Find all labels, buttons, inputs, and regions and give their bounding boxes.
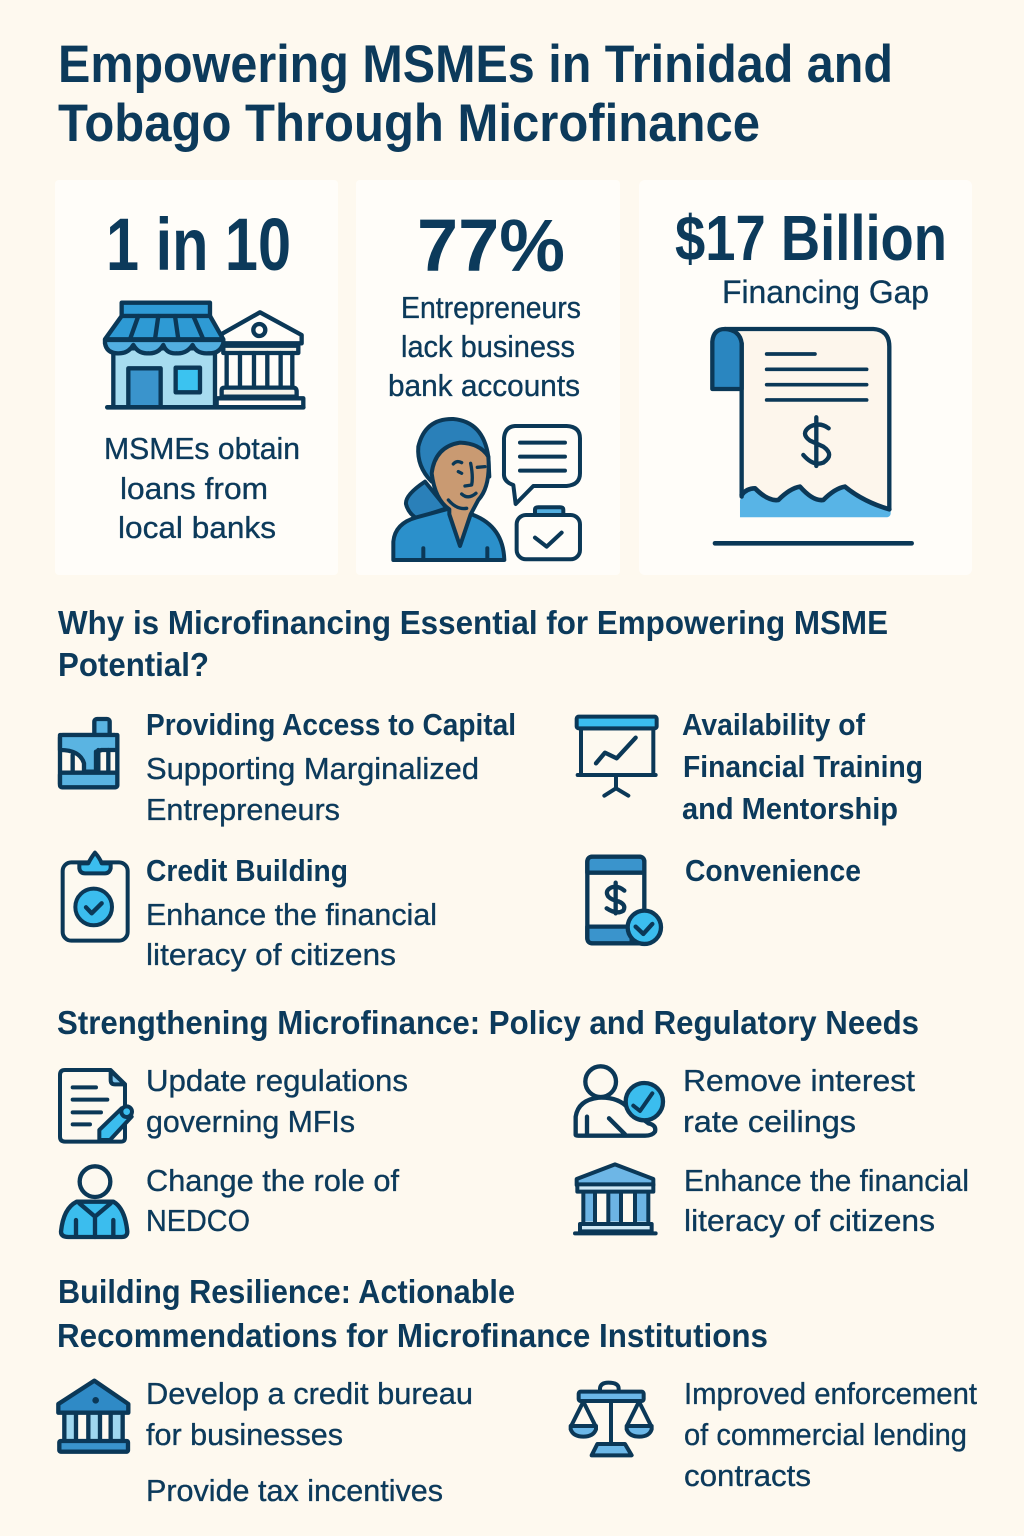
text: update regulations: governing MFIs	[146, 1104, 355, 1139]
text: convenience: Convenience	[685, 853, 861, 888]
section heading: why microfinancing: Potential?	[58, 646, 209, 683]
text: credit building: Enhance the financial	[146, 897, 437, 932]
stat number: 1 in 10: 1 in 10	[106, 203, 291, 286]
icon: columned institution	[575, 1164, 656, 1233]
description: Entrepreneurs lack business bank accounts	[388, 290, 581, 403]
panel: 1 in 10 statistic	[55, 180, 338, 575]
text: credit bureau and tax incentives: Provide tax incentives	[146, 1473, 443, 1508]
description: MSMEs obtain loans from local banks: MSMEs obtain	[104, 431, 300, 466]
text: credit bureau and tax incentives	[146, 1376, 473, 1508]
text: financial training and mentorship: Financial Training	[683, 749, 923, 784]
text: remove interest rate ceilings: Remove interest	[683, 1063, 915, 1098]
section heading: recommendations: Building Resilience: Actionable	[58, 1273, 515, 1310]
section heading: why microfinancing	[58, 604, 888, 683]
panel: 77% statistic	[356, 180, 620, 575]
text: financial training and mentorship: and Mentorship	[682, 791, 898, 826]
panel: $17 billion statistic	[639, 180, 972, 575]
icon: capital building	[60, 719, 117, 787]
title: Empowering MSMEs in Trinidad and	[58, 35, 893, 94]
section heading: policy and regulatory needs: Strengthening Microfinance: Policy and Regulatory Needs	[57, 1004, 919, 1041]
text: providing access to capital: Supporting Marginalized	[146, 751, 479, 786]
text: change the role of NEDCO: Change the role of	[146, 1163, 399, 1198]
text: credit building	[146, 853, 437, 972]
text: credit building: literacy of citizens	[146, 937, 396, 972]
text: enhance the financial literacy of citizens: Enhance the financial	[684, 1163, 969, 1198]
description: Entrepreneurs lack business bank accounts: lack business	[401, 329, 575, 364]
icon: document with pen	[60, 1070, 132, 1142]
icon: person in jacket	[61, 1166, 127, 1237]
text: financial training and mentorship: Availability of	[682, 707, 866, 742]
text: improved enforcement of commercial lending contracts: contracts	[684, 1458, 811, 1493]
text: improved enforcement of commercial lending contracts: Improved enforcement	[684, 1376, 977, 1411]
description: MSMEs obtain loans from local banks: loans from	[120, 471, 268, 506]
text: providing access to capital: Providing Access to Capital	[146, 707, 516, 742]
text: credit bureau and tax incentives: for businesses	[146, 1417, 343, 1452]
text: credit building: Credit Building	[146, 853, 348, 888]
text: change the role of NEDCO: NEDCO	[146, 1203, 250, 1238]
text: remove interest rate ceilings	[683, 1063, 915, 1139]
icon: presentation board	[577, 717, 657, 796]
text: update regulations	[146, 1063, 408, 1139]
icon: balance scales	[571, 1383, 652, 1455]
text: remove interest rate ceilings: rate ceilings	[683, 1104, 856, 1139]
icon: entrepreneur with speech bubble and briefcase	[393, 419, 580, 560]
text: enhance the financial literacy of citizens: literacy of citizens	[684, 1203, 935, 1238]
description: Entrepreneurs lack business bank accounts: Entrepreneurs	[401, 290, 581, 325]
description: Entrepreneurs lack business bank accounts: bank accounts	[388, 368, 580, 403]
title	[58, 35, 893, 153]
description: Financing Gap: Financing Gap	[722, 274, 929, 310]
icon: bill with dollar sign	[712, 329, 912, 543]
stat number: 77%: 77%	[417, 204, 565, 287]
text: credit bureau and tax incentives: Develop a credit bureau	[146, 1376, 473, 1411]
description: MSMEs obtain loans from local banks: local banks	[118, 510, 276, 545]
title: Tobago Through Microfinance	[58, 94, 760, 153]
text: financial training and mentorship	[682, 707, 923, 826]
icon: bank	[58, 1381, 128, 1452]
icon: phone with dollar and check	[587, 857, 661, 944]
text: change the role of NEDCO	[146, 1163, 399, 1238]
text: providing access to capital	[146, 707, 516, 827]
icon: person with check badge	[576, 1066, 663, 1136]
text: improved enforcement of commercial lending contracts: of commercial lending	[684, 1417, 967, 1452]
text: enhance the financial literacy of citizens	[684, 1163, 969, 1238]
text: improved enforcement of commercial lending contracts	[684, 1376, 977, 1493]
description: MSMEs obtain loans from local banks	[104, 431, 300, 545]
text: providing access to capital: Entrepreneurs	[146, 792, 340, 827]
icon: clipboard with check	[63, 853, 128, 941]
text: update regulations: Update regulations	[146, 1063, 408, 1098]
section heading: recommendations	[57, 1273, 768, 1354]
section heading: recommendations: Recommendations for Microfinance Institutions	[57, 1317, 768, 1354]
stat number: $17 Billion: $17 Billion	[675, 202, 947, 274]
icon: shop and bank	[105, 303, 303, 407]
section heading: why microfinancing: Why is Microfinancing Essential for Empowering MSME	[58, 604, 888, 641]
